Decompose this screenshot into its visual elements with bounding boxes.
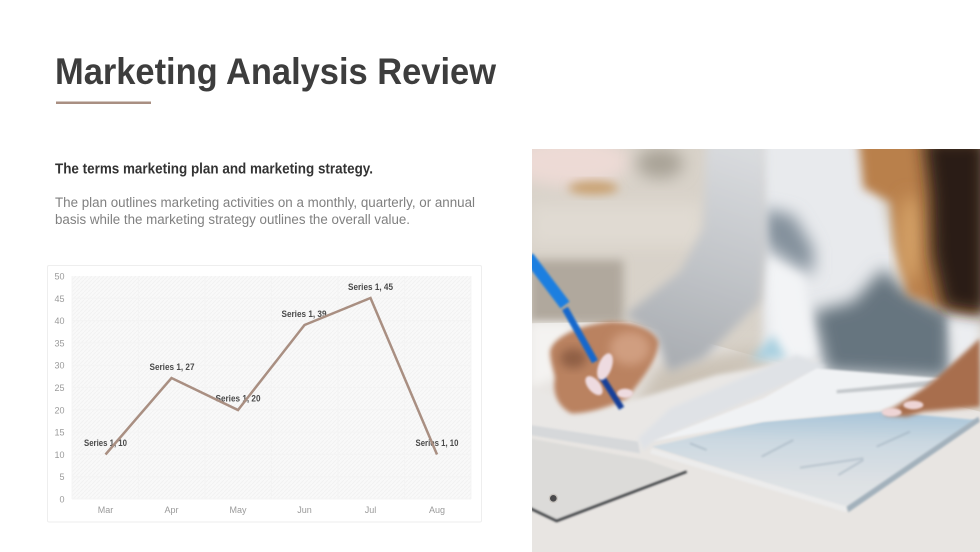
x axis labels: Jul	[365, 505, 376, 515]
folder	[530, 438, 687, 521]
left table highlight	[532, 318, 570, 384]
blurred room background	[510, 137, 703, 323]
y axis labels: 10	[54, 450, 64, 460]
hair	[858, 138, 980, 315]
x axis labels: Jun	[297, 505, 312, 515]
data labels: Series 1, 45	[348, 282, 393, 292]
data labels: Series 1, 10	[84, 438, 127, 448]
title underline	[56, 102, 151, 104]
plot area	[72, 276, 471, 499]
panel: line chart	[48, 266, 482, 522]
body text	[55, 195, 475, 227]
y axis labels: 45	[54, 294, 64, 304]
x axis labels: Mar	[98, 505, 113, 515]
sweater torso	[750, 132, 980, 382]
y axis labels	[54, 272, 64, 504]
y axis labels: 20	[54, 405, 64, 415]
subheading: The terms marketing plan and marketing strategy.	[55, 162, 373, 178]
grommet	[549, 494, 557, 502]
y axis labels: 50	[54, 272, 64, 282]
data labels: Series 1, 27	[150, 362, 194, 372]
y axis labels: 40	[54, 316, 64, 326]
y axis labels: 15	[54, 428, 64, 438]
x axis labels: Aug	[429, 505, 445, 515]
body text: basis while the marketing strategy outlines the overall value.	[55, 212, 410, 227]
data labels: Series 1, 10	[416, 438, 458, 448]
x axis labels	[98, 505, 445, 515]
data labels: Series 1, 39	[282, 309, 326, 319]
series line	[106, 298, 437, 454]
turned page	[653, 368, 942, 441]
pen	[528, 257, 622, 408]
fingernails	[582, 351, 633, 398]
x axis labels: May	[229, 505, 247, 515]
data labels	[84, 282, 458, 448]
y axis labels: 30	[54, 361, 64, 371]
table surface	[530, 322, 980, 552]
left notebook pages	[627, 367, 764, 418]
y axis labels: 5	[59, 472, 64, 482]
chart frame	[48, 266, 482, 522]
data labels: Series 1, 20	[216, 394, 260, 404]
writing hand	[550, 322, 658, 413]
y axis labels: 25	[54, 383, 64, 393]
sweater sleeve	[625, 138, 766, 372]
photo background	[532, 149, 980, 412]
area behind notebook	[632, 347, 770, 400]
y axis labels: 0	[59, 494, 64, 504]
body text: The plan outlines marketing activities on a monthly, quarterly, or annual	[55, 195, 475, 210]
y axis labels: 35	[54, 338, 64, 348]
title: Marketing Analysis Review	[55, 51, 496, 92]
lower notebook page	[650, 412, 980, 512]
right hand	[882, 338, 980, 417]
x axis labels: Apr	[164, 505, 179, 515]
photo: person writing in a notebook	[510, 132, 980, 552]
spiral binding	[638, 355, 827, 450]
